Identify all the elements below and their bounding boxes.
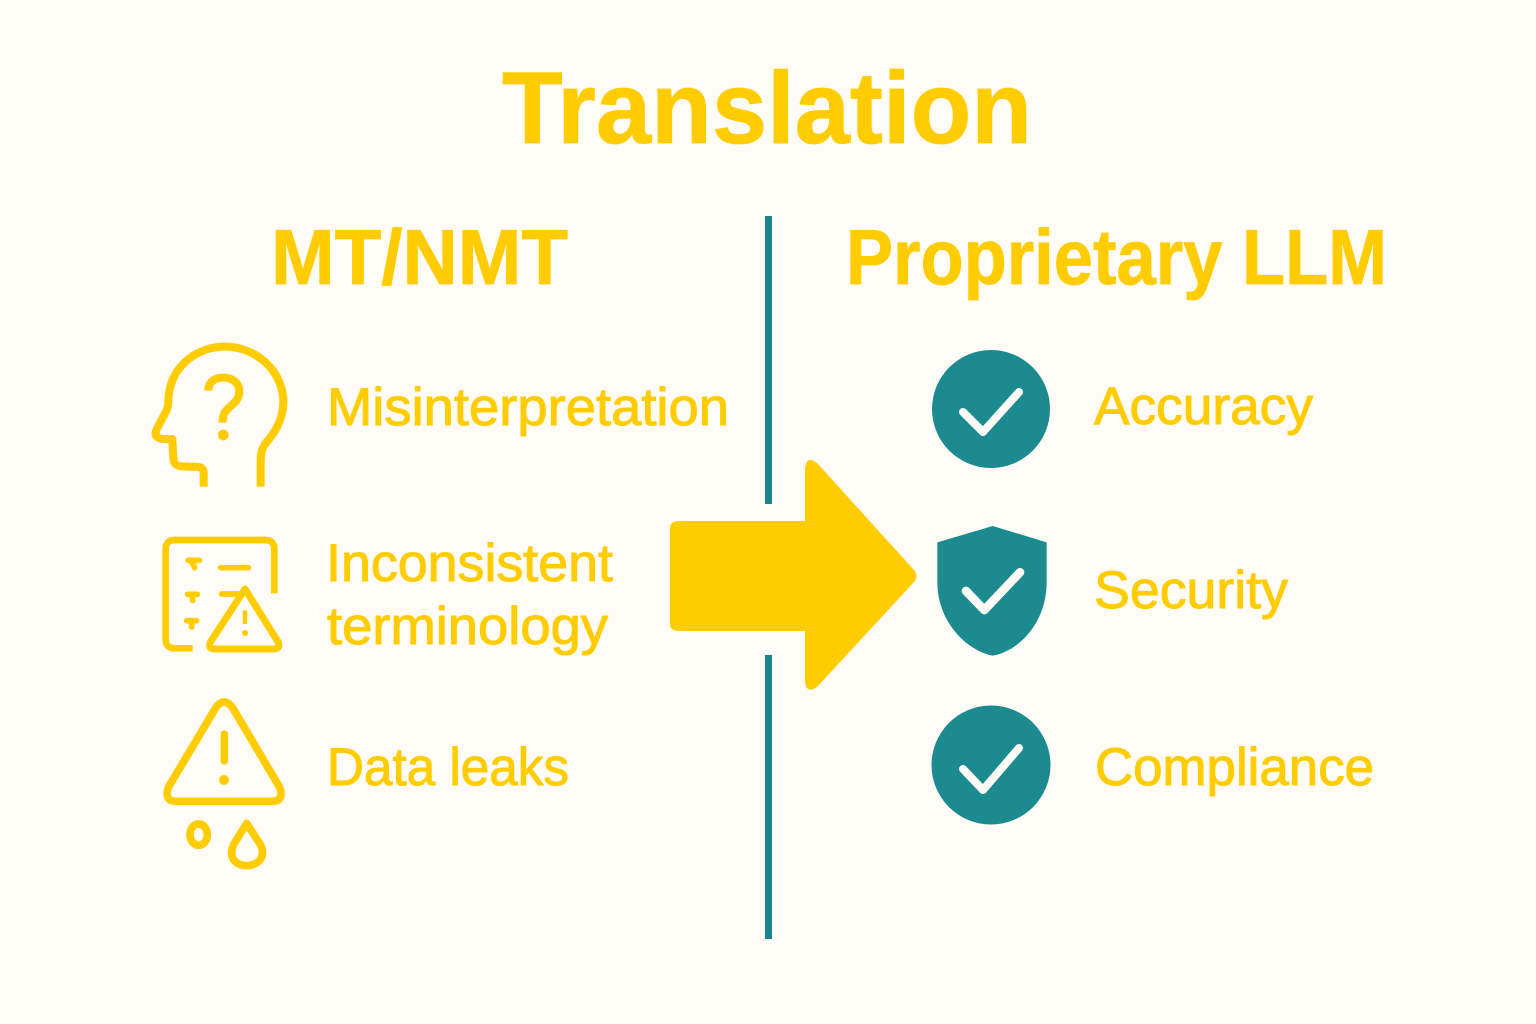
label: Security: Security [1094, 561, 1289, 620]
arrow [670, 460, 916, 690]
heading: MT/NMT: MT/NMT [271, 213, 568, 301]
panel: Proprietary LLM benefits [932, 350, 1374, 824]
icon: shield with check [937, 526, 1047, 656]
icon: warning triangle with drops [167, 702, 281, 866]
label: Inconsistent terminology [326, 534, 613, 656]
label: Accuracy: Accuracy [1094, 377, 1314, 436]
label: Misinterpretation: Misinterpretation [327, 378, 729, 437]
icon: check circle compliance [932, 706, 1050, 824]
label: Compliance: Compliance [1095, 738, 1374, 797]
title: Translation [502, 51, 1032, 165]
icon: head with question mark [156, 347, 283, 487]
label: Inconsistent terminology: terminology [327, 597, 608, 656]
heading: Proprietary LLM: Proprietary LLM [846, 213, 1387, 301]
label: Data leaks: Data leaks [327, 738, 569, 797]
label: Inconsistent terminology: Inconsistent [326, 534, 613, 593]
center divider [765, 216, 772, 939]
icon: glossary document with warning [166, 540, 279, 649]
icon: check circle accuracy [932, 350, 1050, 468]
panel: MT/NMT issues [156, 347, 729, 866]
